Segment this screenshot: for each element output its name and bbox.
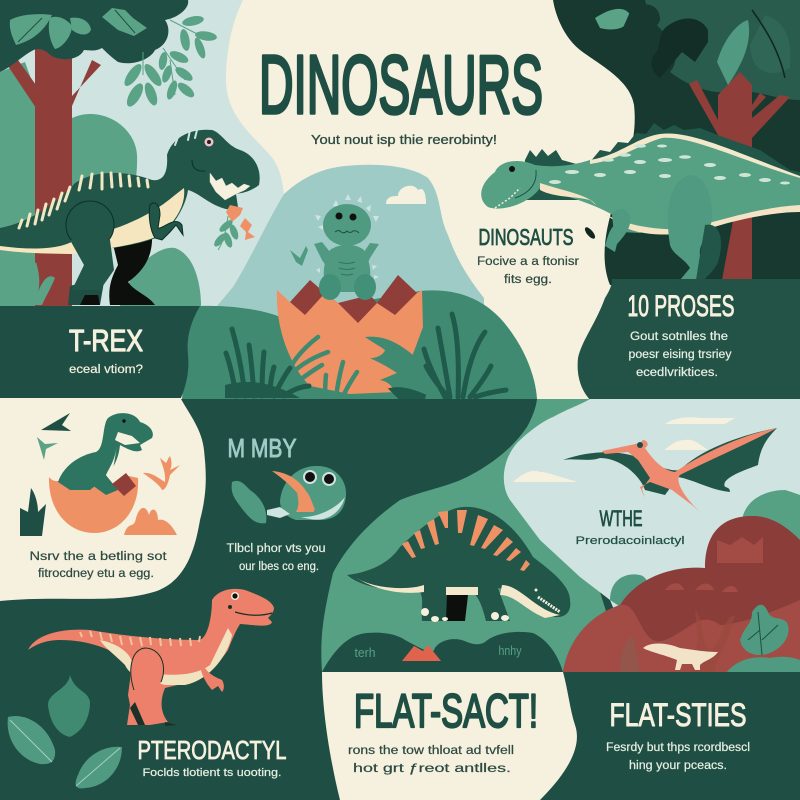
text: m mby bbox=[226, 543, 326, 573]
mound scribble right: hnhy bbox=[498, 643, 522, 658]
panel: flat-sact bbox=[322, 672, 577, 800]
heading: 10 proses: 10 PROSES bbox=[628, 290, 734, 323]
heading: t-rex: T-REX bbox=[69, 323, 143, 358]
caption: dinosauts: Focive a a ftonisr bbox=[477, 256, 579, 268]
text: flat-sties bbox=[606, 742, 750, 772]
coral bush bbox=[124, 508, 177, 535]
dark ground mounds bbox=[322, 632, 563, 672]
text: flat-sact bbox=[348, 745, 514, 775]
text: 10 proses: poesr eising trsriey bbox=[628, 349, 732, 361]
text: hatching bbox=[30, 551, 168, 580]
text: 10 proses: Gout sotnlles the bbox=[630, 331, 728, 343]
heading: pterodactyl: PTERODACTYL bbox=[138, 735, 286, 765]
bird creature bbox=[232, 466, 346, 523]
heading: flat-sact: FLAT-SACT! bbox=[354, 684, 538, 737]
small bird shapes bbox=[41, 413, 71, 431]
text: flat-sact: rons the tow thloat ad tvfell bbox=[348, 745, 514, 757]
text: 10 proses: ecedlvriktices. bbox=[636, 367, 718, 379]
panel: 10 proses bbox=[578, 279, 800, 402]
coral raptor bbox=[28, 589, 274, 726]
dark plant bbox=[20, 488, 46, 536]
egg bbox=[49, 475, 138, 533]
tree trunk bbox=[8, 45, 101, 306]
leaves bbox=[595, 4, 790, 85]
leaves bbox=[8, 675, 122, 788]
panel: t-rex scene bbox=[0, 0, 284, 310]
back tree bbox=[689, 72, 790, 280]
panel: lower green and sky bbox=[321, 399, 800, 672]
clouds bbox=[513, 417, 735, 482]
text: flat-sact: hot grt ƒreot antlles. bbox=[353, 763, 511, 775]
leafy bush bbox=[727, 605, 800, 672]
foreground plants bbox=[225, 314, 506, 398]
cloud bbox=[386, 186, 426, 204]
pterodactyl bbox=[563, 428, 777, 512]
hanging leaves bbox=[121, 14, 218, 109]
teal foreground leaf bbox=[280, 337, 430, 399]
small check sprig bbox=[37, 437, 58, 460]
coral branch bbox=[143, 456, 180, 490]
panel: hatchling scene bbox=[182, 165, 537, 399]
text: hatching: Nsrv the a betling sot bbox=[30, 551, 168, 563]
caption line 2: dinosauts: fits egg. bbox=[504, 274, 552, 286]
text: hatching: fitrocdney etu a egg. bbox=[38, 568, 154, 580]
small red peaks bbox=[402, 645, 441, 661]
food plant bbox=[212, 205, 255, 250]
panel: hatching t-rex bbox=[0, 399, 206, 601]
subtitle: Yout nout isp thie reerobinty! bbox=[311, 132, 497, 147]
sauropod bbox=[347, 507, 570, 622]
title: DINOSAURS bbox=[259, 38, 543, 131]
spiny dark back bbox=[520, 123, 800, 200]
caption: pterodactyl: Prerodacoinlactyl bbox=[576, 535, 684, 547]
green bumps behind hills bbox=[742, 490, 800, 540]
text: 10 proses bbox=[628, 331, 732, 379]
small sprig bbox=[290, 246, 308, 266]
mini t-rex bbox=[58, 413, 153, 496]
t-rex bbox=[0, 130, 260, 305]
small plant bbox=[12, 262, 55, 305]
big egg bbox=[277, 275, 423, 394]
heading: m mby: M MBY bbox=[228, 433, 296, 463]
text: m mby: Tlbcl phor vts you bbox=[226, 543, 326, 555]
caption: pterodactyl lower: Foclds tlotient ts uooting. bbox=[142, 767, 282, 779]
text: m mby: our lbes co eng. bbox=[239, 561, 319, 573]
text: flat-sties: hing your pceacs. bbox=[629, 760, 727, 772]
caption: t-rex: eceal vtiom? bbox=[69, 364, 143, 376]
panel: t-rex caption bbox=[0, 306, 200, 398]
tree canopy bbox=[0, 0, 188, 72]
heading: flat-sties: FLAT-STIES bbox=[610, 697, 746, 733]
red hills bbox=[563, 516, 800, 672]
text: flat-sties: Fesrdy but thps rcordbescl bbox=[606, 742, 750, 754]
baby dinosaur bbox=[314, 194, 379, 300]
stegosaur green dinosaur bbox=[481, 133, 800, 280]
lower dark base bbox=[0, 399, 800, 800]
panel: top right forest bbox=[481, 0, 800, 285]
dinosaur foot dark bbox=[696, 225, 721, 280]
mound scribble: terh bbox=[354, 645, 376, 660]
heading: wthe: WTHE bbox=[600, 506, 642, 531]
heading: dinosauts: DINOSAUTS bbox=[478, 224, 574, 250]
small cream dinosaur bbox=[643, 644, 718, 670]
